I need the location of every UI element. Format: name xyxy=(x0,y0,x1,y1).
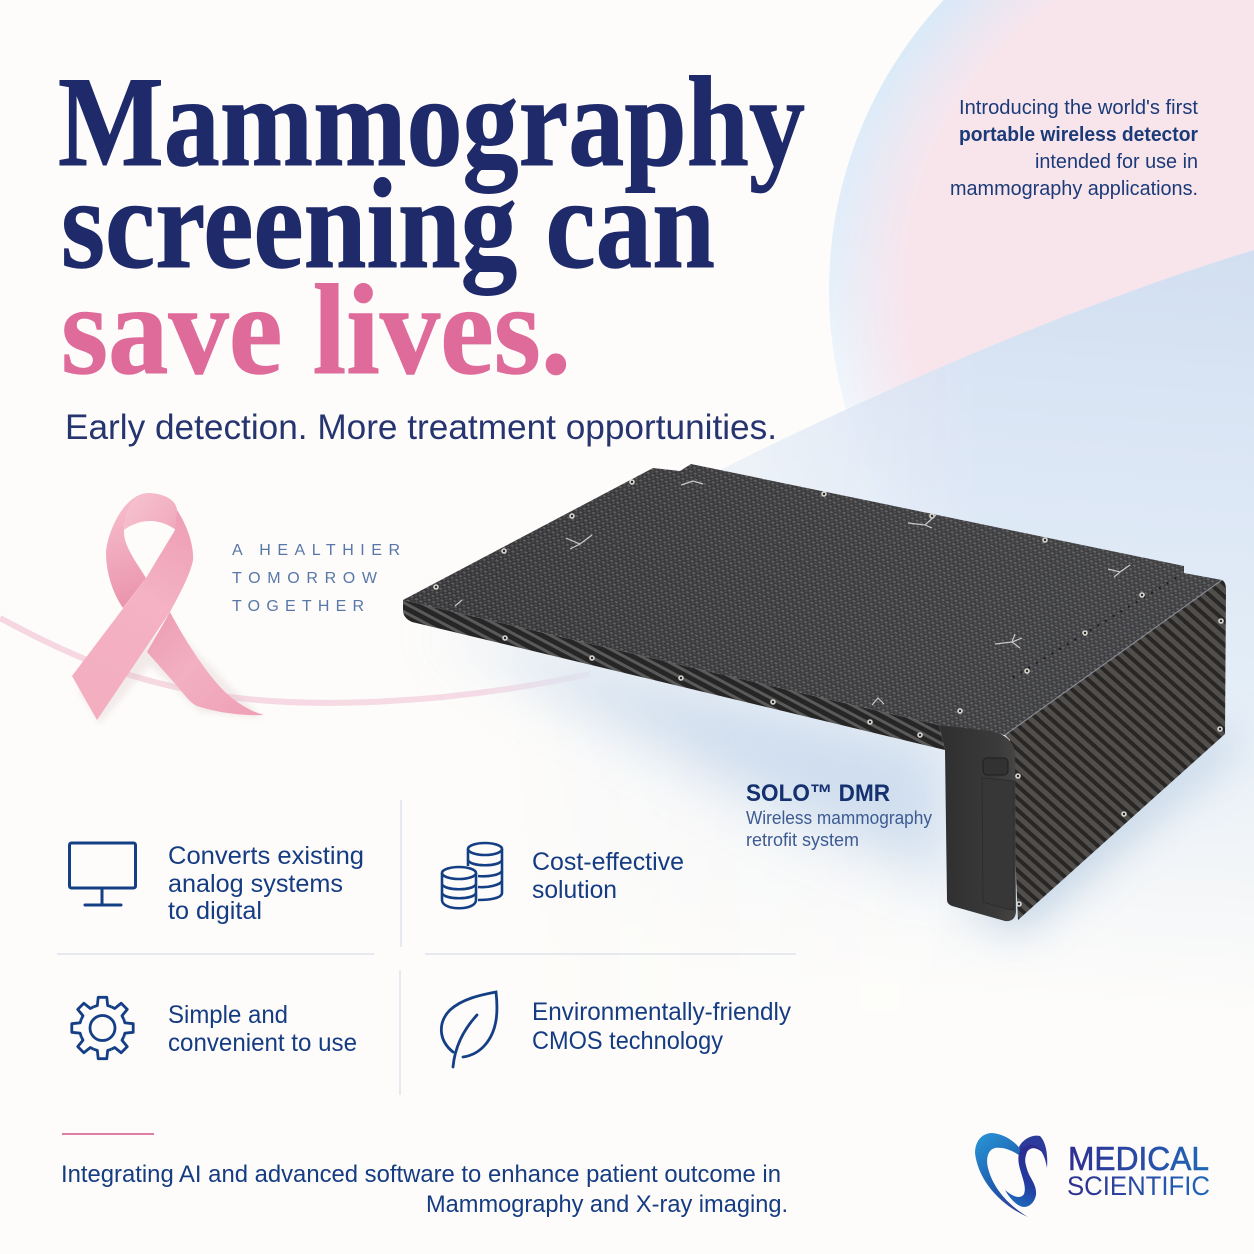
feature: environmentally friendly xyxy=(441,992,791,1067)
footer text: Integrating AI and advanced software to enhance patient outcome in xyxy=(61,1161,781,1188)
product label: SOLO™ DMR xyxy=(746,780,890,807)
side panel xyxy=(1005,580,1226,920)
logo xyxy=(975,1133,1210,1217)
background xyxy=(720,0,1254,906)
feature text: Cost-effective xyxy=(532,848,684,876)
logo wordmark xyxy=(1067,1140,1210,1201)
feature: analog to digital xyxy=(70,842,364,925)
product label xyxy=(746,780,932,850)
feature text: solution xyxy=(532,876,617,904)
intro text xyxy=(950,97,1198,200)
footer accent line xyxy=(62,1133,154,1135)
feature text xyxy=(532,848,684,904)
leg door xyxy=(982,778,1014,910)
icon: monitor xyxy=(70,843,136,905)
dotted line xyxy=(1012,578,1176,678)
top surface xyxy=(403,464,1222,735)
ribbon tail xyxy=(147,612,264,715)
screws xyxy=(434,480,1223,906)
feature text xyxy=(532,998,791,1055)
feature text xyxy=(168,1001,357,1057)
leg xyxy=(939,725,1016,921)
feature text: to digital xyxy=(168,897,262,925)
product: detector xyxy=(403,464,1235,930)
feature text: Environmentally-friendly xyxy=(532,998,791,1026)
intro text: Introducing the world's first xyxy=(959,97,1198,119)
feature text: analog systems xyxy=(168,870,343,898)
tagline: A HEALTHIER xyxy=(232,542,400,559)
logo wordmark: MEDICAL xyxy=(1068,1140,1209,1177)
ribbon back strand xyxy=(106,493,150,608)
logo mark xyxy=(975,1133,1047,1217)
ribbon shadow xyxy=(78,625,262,724)
title: screening can xyxy=(61,152,715,296)
highlight edge xyxy=(1005,580,1222,735)
intro text: intended for use in xyxy=(1035,151,1198,173)
front edge xyxy=(403,600,945,750)
ribbon loop top xyxy=(124,493,177,530)
feature: cost-effective xyxy=(442,843,684,908)
icon: pink ribbon xyxy=(72,493,264,724)
product label: Wireless mammography xyxy=(746,808,932,828)
title: save lives. xyxy=(61,258,571,401)
tagline: TOGETHER xyxy=(232,598,364,615)
tagline xyxy=(232,542,400,615)
footer text xyxy=(61,1161,788,1218)
subtitle: Early detection. More treatment opportunities. xyxy=(65,408,777,447)
footer text: Mammography and X-ray imaging. xyxy=(426,1191,788,1218)
tagline: TOMORROW xyxy=(232,570,378,587)
icon: gear xyxy=(72,997,133,1059)
title xyxy=(58,50,805,401)
title: Mammography xyxy=(58,50,805,194)
ribbon main band xyxy=(72,510,193,720)
intro text: portable wireless detector xyxy=(959,124,1198,146)
product label: retrofit system xyxy=(746,830,859,850)
icon: leaf xyxy=(441,992,497,1067)
feature text xyxy=(168,842,364,925)
leg button xyxy=(983,758,1008,775)
feature text: Converts existing xyxy=(168,842,364,870)
feature text: convenient to use xyxy=(168,1029,357,1057)
device shadow xyxy=(430,625,950,880)
top sheen xyxy=(403,464,1222,735)
logo wordmark: SCIENTIFIC xyxy=(1067,1171,1210,1201)
icon: coins xyxy=(442,843,502,908)
feature text: CMOS technology xyxy=(532,1027,723,1055)
feature: simple to use xyxy=(72,997,357,1059)
alignment marks xyxy=(455,481,1130,705)
pink arc line xyxy=(0,618,590,703)
intro text: mammography applications. xyxy=(950,178,1198,200)
feature text: Simple and xyxy=(168,1001,288,1029)
